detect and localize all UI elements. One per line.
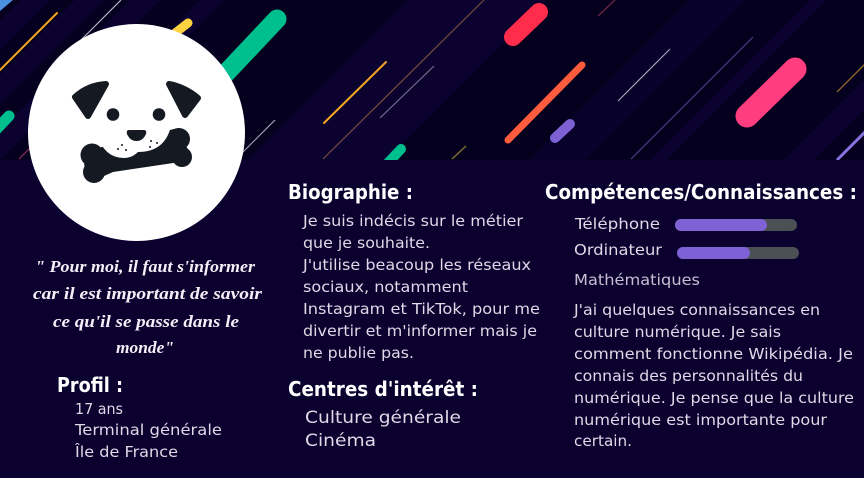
olive thin streak bbox=[452, 146, 466, 159]
heading: centres d'intérêt: Centres d'intérêt : bbox=[288, 377, 478, 401]
compétences text: J'ai quelques connaissances en bbox=[573, 301, 820, 319]
heading: biographie: Biographie : bbox=[288, 180, 413, 204]
skill: téléphone bbox=[574, 215, 797, 233]
profil details: Terminal générale bbox=[74, 421, 222, 439]
gray thin streak bbox=[243, 120, 276, 153]
brown thin streak bbox=[323, 0, 484, 159]
compétences text: connais des personnalités du bbox=[574, 367, 803, 385]
biographie text: Instagram et TikTok, pour me bbox=[303, 300, 540, 318]
quote: " Pour moi, il faut s'informer bbox=[35, 257, 255, 276]
profil details: Île de France bbox=[74, 442, 178, 461]
skill: ordinateur: Ordinateur bbox=[574, 241, 663, 259]
icon: dog muzzle bbox=[97, 122, 171, 158]
profil details: 17 ans bbox=[75, 400, 123, 418]
compétences text bbox=[573, 301, 854, 450]
panel: profil bbox=[57, 373, 222, 461]
green large streak bbox=[210, 19, 277, 90]
icon: whisker dots bbox=[117, 140, 158, 151]
white thin streak bbox=[80, 0, 122, 40]
blue streak bbox=[0, 0, 13, 11]
icon: dog ear left bbox=[75, 84, 106, 116]
gray thin streak 3 bbox=[380, 66, 434, 118]
panel: biographie bbox=[288, 180, 540, 362]
quote: car il est important de savoir bbox=[33, 284, 262, 303]
biographie text: que je souhaite. bbox=[303, 234, 430, 252]
biographie text bbox=[302, 212, 540, 362]
orange thin streak bbox=[0, 13, 57, 70]
compétences text: numérique. Je pense que la culture bbox=[574, 389, 854, 407]
heading: profil: Profil : bbox=[57, 373, 123, 397]
interests list: Culture générale bbox=[305, 408, 461, 428]
profil details bbox=[74, 400, 222, 461]
avatar circle with dog and bone bbox=[28, 24, 245, 241]
icon: dog nose bbox=[127, 130, 146, 141]
purple right streak bbox=[837, 131, 864, 160]
green left streak bbox=[0, 116, 9, 136]
green small streak bbox=[385, 149, 401, 166]
dim purple streak bbox=[631, 37, 753, 159]
pink thin streak bbox=[18, 148, 30, 160]
interests list: Cinéma bbox=[305, 431, 376, 451]
biographie text: J'utilise beacoup les réseaux bbox=[302, 256, 531, 274]
icon: dog ear right bbox=[169, 84, 198, 115]
icon: dog eyes bbox=[107, 108, 165, 121]
biographie text: sociaux, notamment bbox=[303, 278, 468, 296]
biographie text: ne publie pas. bbox=[303, 344, 414, 362]
brown right streak bbox=[837, 63, 864, 92]
yellow streak bbox=[170, 23, 188, 37]
purple capsule bbox=[555, 124, 570, 138]
panel: centres d'intérêt bbox=[288, 377, 478, 451]
compétences text: comment fonctionne Wikipédia. Je bbox=[574, 345, 853, 363]
panel: compétences bbox=[545, 180, 857, 450]
orange-red streak bbox=[508, 65, 582, 140]
compétences text: certain. bbox=[574, 432, 632, 450]
skill: ordinateur bbox=[574, 241, 799, 259]
interests list bbox=[305, 408, 461, 451]
biographie text: divertir et m'informer mais je bbox=[303, 322, 537, 340]
icon: bone bbox=[80, 128, 192, 183]
orange thin streak 2 bbox=[324, 62, 386, 123]
dark red thin streak bbox=[598, 0, 615, 16]
header banner with diagonal streaks bbox=[0, 0, 864, 166]
biographie text: Je suis indécis sur le métier bbox=[302, 212, 524, 230]
pink capsule bbox=[747, 69, 795, 116]
quote: ce qu'il se passe dans le bbox=[53, 312, 240, 331]
compétences text: numérique est importante pour bbox=[574, 411, 828, 429]
skill: mathématiques: Mathématiques bbox=[574, 271, 700, 289]
red capsule bbox=[513, 12, 539, 37]
quote: monde" bbox=[116, 338, 174, 357]
compétences text: culture numérique. Je sais bbox=[574, 323, 781, 341]
quote bbox=[33, 257, 262, 357]
skill: téléphone: Téléphone bbox=[574, 215, 660, 233]
light gray streak bbox=[618, 49, 670, 101]
